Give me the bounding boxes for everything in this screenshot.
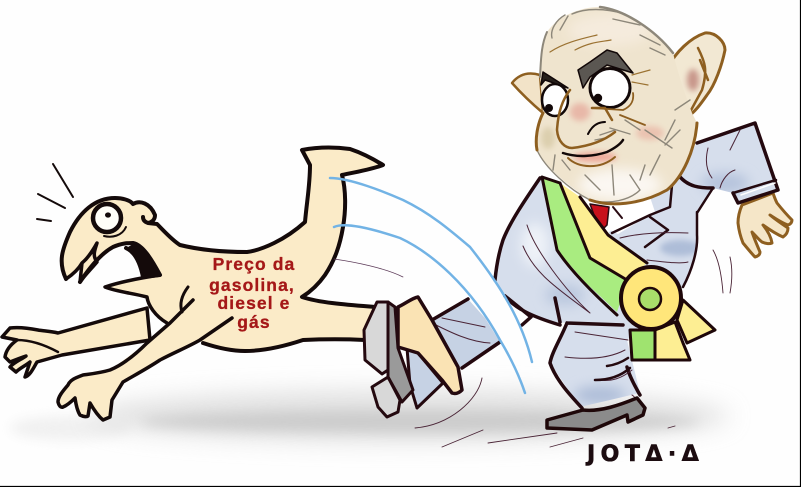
kicking cuff — [407, 348, 443, 408]
eyes — [542, 84, 568, 116]
back arm — [2, 308, 150, 377]
sash — [542, 177, 628, 312]
body — [62, 148, 383, 351]
front arm — [58, 300, 232, 420]
open mouth — [66, 243, 167, 323]
forehead lines — [550, 35, 650, 85]
eyebrows — [578, 50, 633, 88]
left ear — [512, 74, 543, 113]
eye — [93, 204, 126, 237]
head outline — [540, 32, 547, 77]
jacket shading — [521, 173, 749, 404]
surprise marks — [37, 164, 73, 221]
sash ribbons — [630, 330, 655, 360]
jacket creases — [523, 130, 740, 410]
nose — [557, 90, 615, 148]
label: fuel prices: diesel e — [217, 293, 291, 313]
kicking shoe — [364, 302, 413, 417]
face — [536, 7, 697, 204]
chest mark — [181, 287, 188, 312]
label: fuel prices — [209, 254, 295, 332]
hand — [738, 193, 792, 257]
standing shoe — [547, 398, 645, 430]
hair and beard strokes — [537, 10, 690, 202]
rosette — [621, 267, 681, 329]
label: fuel prices: Preço da — [213, 254, 295, 274]
motion lines — [330, 178, 732, 447]
jacket outline — [495, 178, 640, 408]
creature: fuel prices — [2, 148, 383, 420]
label: fuel prices: gasolina, — [209, 275, 295, 295]
president figure — [364, 7, 792, 430]
signature: JOTΔ·Δ — [585, 442, 704, 467]
jacket — [495, 123, 778, 407]
finger detail — [17, 340, 58, 352]
kicking foot — [398, 297, 462, 394]
head — [512, 7, 725, 204]
mouth — [563, 140, 623, 156]
right ear — [668, 33, 725, 118]
face shading — [541, 14, 664, 201]
label: fuel prices: gás — [237, 312, 271, 332]
shirt and tie — [606, 197, 655, 234]
kicking thigh — [432, 299, 500, 368]
